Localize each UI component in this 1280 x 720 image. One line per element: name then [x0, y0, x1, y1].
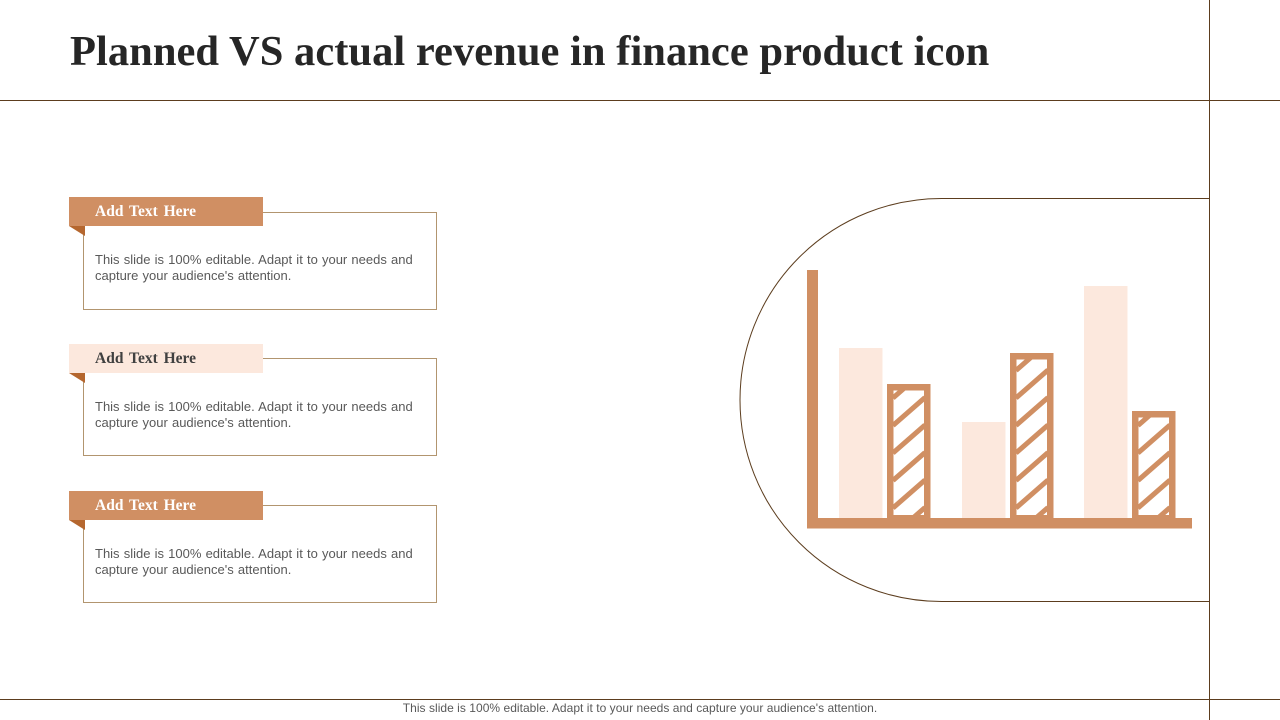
ribbon heading 1: Add Text Here — [95, 203, 196, 220]
title: Planned VS actual revenue in finance product icon — [70, 28, 989, 75]
panel: card 1 — [69, 197, 437, 310]
ribbon heading 3 — [69, 491, 263, 520]
ribbon heading 3: Add Text Here — [95, 497, 196, 514]
ribbon fold 3 — [69, 520, 85, 530]
card 2 text — [95, 399, 413, 430]
chart axes — [807, 270, 1192, 528]
card 3 text: capture your audience's attention. — [95, 562, 291, 577]
actual bars hatched — [887, 353, 1176, 518]
ribbon heading 2: Add Text Here — [95, 350, 196, 367]
planned bars — [839, 286, 1128, 518]
footer note: This slide is 100% editable. Adapt it to your needs and capture your audience's attention. — [403, 701, 877, 715]
rounded outline — [740, 198, 1209, 602]
card 2 text: capture your audience's attention. — [95, 415, 291, 430]
ribbon fold 1 — [69, 226, 85, 236]
ribbon heading 2 — [69, 344, 263, 373]
ribbon heading 1 — [69, 197, 263, 226]
card 1 text: This slide is 100% editable. Adapt it to your needs and — [95, 252, 413, 267]
card 3 text — [95, 546, 413, 577]
card 2 text: This slide is 100% editable. Adapt it to your needs and — [95, 399, 413, 414]
chart panel: rounded outline with bar chart icon — [740, 198, 1209, 602]
ribbon fold 2 — [69, 373, 85, 383]
card 1 text — [95, 252, 413, 283]
card 1 text: capture your audience's attention. — [95, 268, 291, 283]
panel: card 2 — [69, 344, 437, 456]
card 3 text: This slide is 100% editable. Adapt it to your needs and — [95, 546, 413, 561]
panel: card 3 — [69, 491, 437, 603]
